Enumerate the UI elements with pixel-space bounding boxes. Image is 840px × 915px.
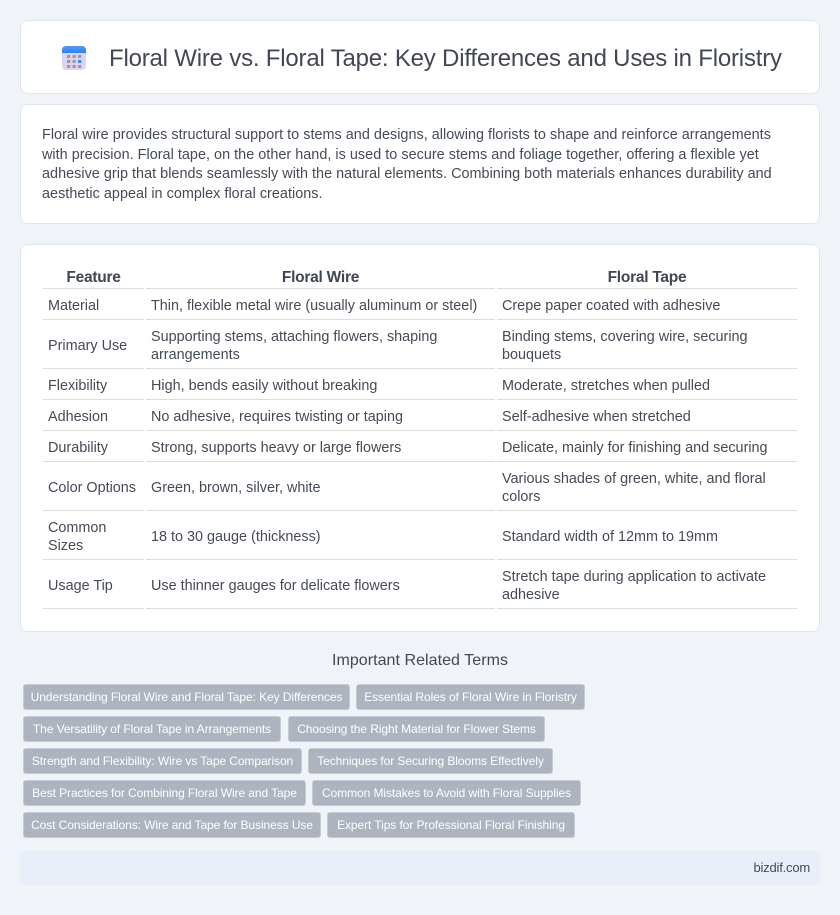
intro text: aesthetic appeal in complex floral creations.: [42, 186, 323, 202]
comparison table: Floral Tape: [608, 269, 686, 286]
header panel: [20, 20, 820, 94]
related terms tags: Choosing the Right Material for Flower Stems: [297, 722, 536, 736]
comparison table: Usage Tip: [48, 578, 113, 594]
comparison table: Adhesion: [48, 409, 108, 425]
related terms tags: Essential Roles of Floral Wire in Floristry: [364, 690, 577, 704]
comparison table panel: [20, 244, 820, 632]
comparison table: Flexibility: [48, 378, 107, 394]
related terms tags: Cost Considerations: Wire and Tape for Business Use: [31, 818, 313, 832]
comparison table: Moderate, stretches when pulled: [502, 378, 710, 394]
comparison table: colors: [502, 489, 540, 505]
comparison table: Primary Use: [48, 338, 127, 354]
intro text: adhesive grip that blends seamlessly with the natural elements. Combining both materials enhances durability and: [42, 166, 772, 182]
footer site name: bizdif.com: [753, 860, 810, 875]
comparison table: Thin, flexible metal wire (usually aluminum or steel): [151, 298, 477, 314]
intro text: [42, 127, 772, 202]
comparison table: Self-adhesive when stretched: [502, 409, 691, 425]
comparison table: High, bends easily without breaking: [151, 378, 377, 394]
intro text: Floral wire provides structural support to stems and designs, allowing florists to shape and reinforce arrangements: [42, 127, 771, 143]
comparison table: Stretch tape during application to activate: [502, 569, 766, 585]
related terms tags: Best Practices for Combining Floral Wire and Tape: [32, 786, 297, 800]
related terms tags: Techniques for Securing Blooms Effectively: [317, 754, 544, 768]
comparison table: Green, brown, silver, white: [151, 480, 321, 496]
comparison table: Floral Wire: [282, 269, 359, 286]
comparison table: Supporting stems, attaching flowers, shaping: [151, 329, 437, 345]
footer bar: [20, 851, 820, 885]
comparison table: Standard width of 12mm to 19mm: [502, 529, 718, 545]
icon: calendar: [62, 46, 86, 70]
comparison table: Material: [48, 298, 99, 314]
comparison table: Common: [48, 520, 106, 536]
comparison table: Binding stems, covering wire, securing: [502, 329, 748, 345]
related terms tags: Expert Tips for Professional Floral Finishing: [337, 818, 565, 832]
comparison table: Durability: [48, 440, 108, 456]
comparison table: Feature: [66, 269, 121, 286]
related terms tags: Strength and Flexibility: Wire vs Tape Comparison: [32, 754, 293, 768]
comparison table: arrangements: [151, 347, 240, 363]
comparison table: Delicate, mainly for finishing and securing: [502, 440, 768, 456]
comparison table: Sizes: [48, 538, 83, 554]
related terms heading: Important Related Terms: [332, 652, 508, 669]
intro text: with precision. Floral tape, on the other hand, is used to secure stems and foliage together, offering a flexible yet: [42, 146, 759, 162]
related terms tags: Understanding Floral Wire and Floral Tape: Key Differences: [31, 690, 342, 704]
related terms tags: Common Mistakes to Avoid with Floral Supplies: [322, 786, 571, 800]
comparison table: Use thinner gauges for delicate flowers: [151, 578, 400, 594]
intro panel: [20, 104, 820, 224]
related terms tags: The Versatility of Floral Tape in Arrangements: [33, 722, 271, 736]
comparison table: Crepe paper coated with adhesive: [502, 298, 720, 314]
comparison table: adhesive: [502, 587, 560, 603]
title: Floral Wire vs. Floral Tape: Key Differences and Uses in Floristry: [109, 45, 782, 72]
comparison table: bouquets: [502, 347, 561, 363]
comparison table: No adhesive, requires twisting or taping: [151, 409, 403, 425]
related terms tags: [23, 684, 585, 838]
comparison table: Strong, supports heavy or large flowers: [151, 440, 401, 456]
comparison table: [43, 269, 797, 609]
comparison table: Color Options: [48, 480, 136, 496]
comparison table: 18 to 30 gauge (thickness): [151, 529, 321, 545]
comparison table: Various shades of green, white, and floral: [502, 471, 766, 487]
